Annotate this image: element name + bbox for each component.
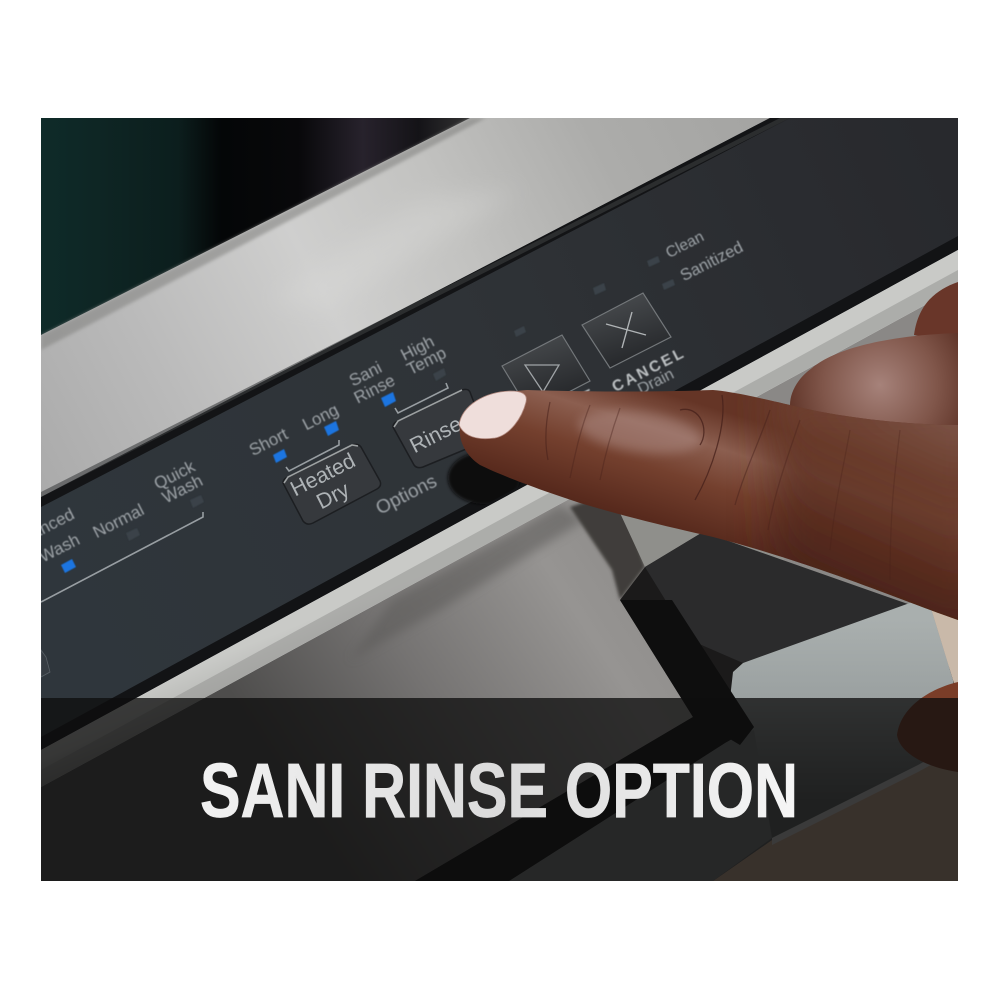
label: Advanced Wash [41,507,80,562]
label: Sani Rinse: Rinse [351,371,398,407]
ring finger [914,282,958,336]
button: Heated Dry: Heated [286,448,359,501]
panel labels [1,228,746,566]
blue indicator lights [61,392,396,573]
label: Quick Wash: Wash [159,471,206,507]
label: Cancel: CANCEL [609,344,689,396]
dim indicator lights [126,256,675,541]
label: High Temp: High [398,332,437,365]
label: High Temp [400,336,446,374]
dark interior background [41,118,481,348]
label: Start fragment: T [580,386,596,406]
hand [458,282,958,620]
middle finger [790,334,958,425]
fingertip reflection [448,452,520,504]
caption overlay band [41,698,958,881]
button: Start [501,334,591,391]
label: Clean: Clean [663,228,707,262]
label: Short: Short [246,424,291,460]
stainless steel top band [41,118,790,505]
left edge button [41,650,50,677]
button: Cancel [582,293,671,368]
label: Sanitized: Sanitized [677,238,746,285]
label: Normal: Normal [90,500,147,542]
button: Heated Dry: Dry [312,477,353,514]
skin highlight [576,408,702,457]
control panel [41,118,958,787]
label: High Temp: Temp [404,343,449,379]
label: Options: Options [373,471,440,519]
index finger [460,390,958,620]
handle [415,532,958,881]
button: Rinse: Rinse [406,412,466,458]
indicator brackets [41,383,448,602]
label: Advanced Wash: Wash [36,530,83,566]
knuckle creases [545,395,900,530]
lower finger behind overlay [897,682,958,772]
label: Sani Rinse: Sani [346,358,385,390]
label: Quick Wash [154,462,204,502]
label: Drain: Drain [635,366,677,398]
label: Sani Rinse [349,360,395,404]
label: Quick Wash: Quick [151,457,199,493]
button: Rinse [392,388,474,468]
fingernail [459,391,526,439]
label: Long: Long [299,400,342,434]
label: Advanced Wash: Advanced [1,504,78,556]
title: SANI RINSE OPTION [200,748,798,834]
palm side shading [576,402,958,620]
lower door steel [41,287,958,881]
button: Heated Dry [283,444,381,524]
photo: dishwasher control panel [1,118,990,881]
